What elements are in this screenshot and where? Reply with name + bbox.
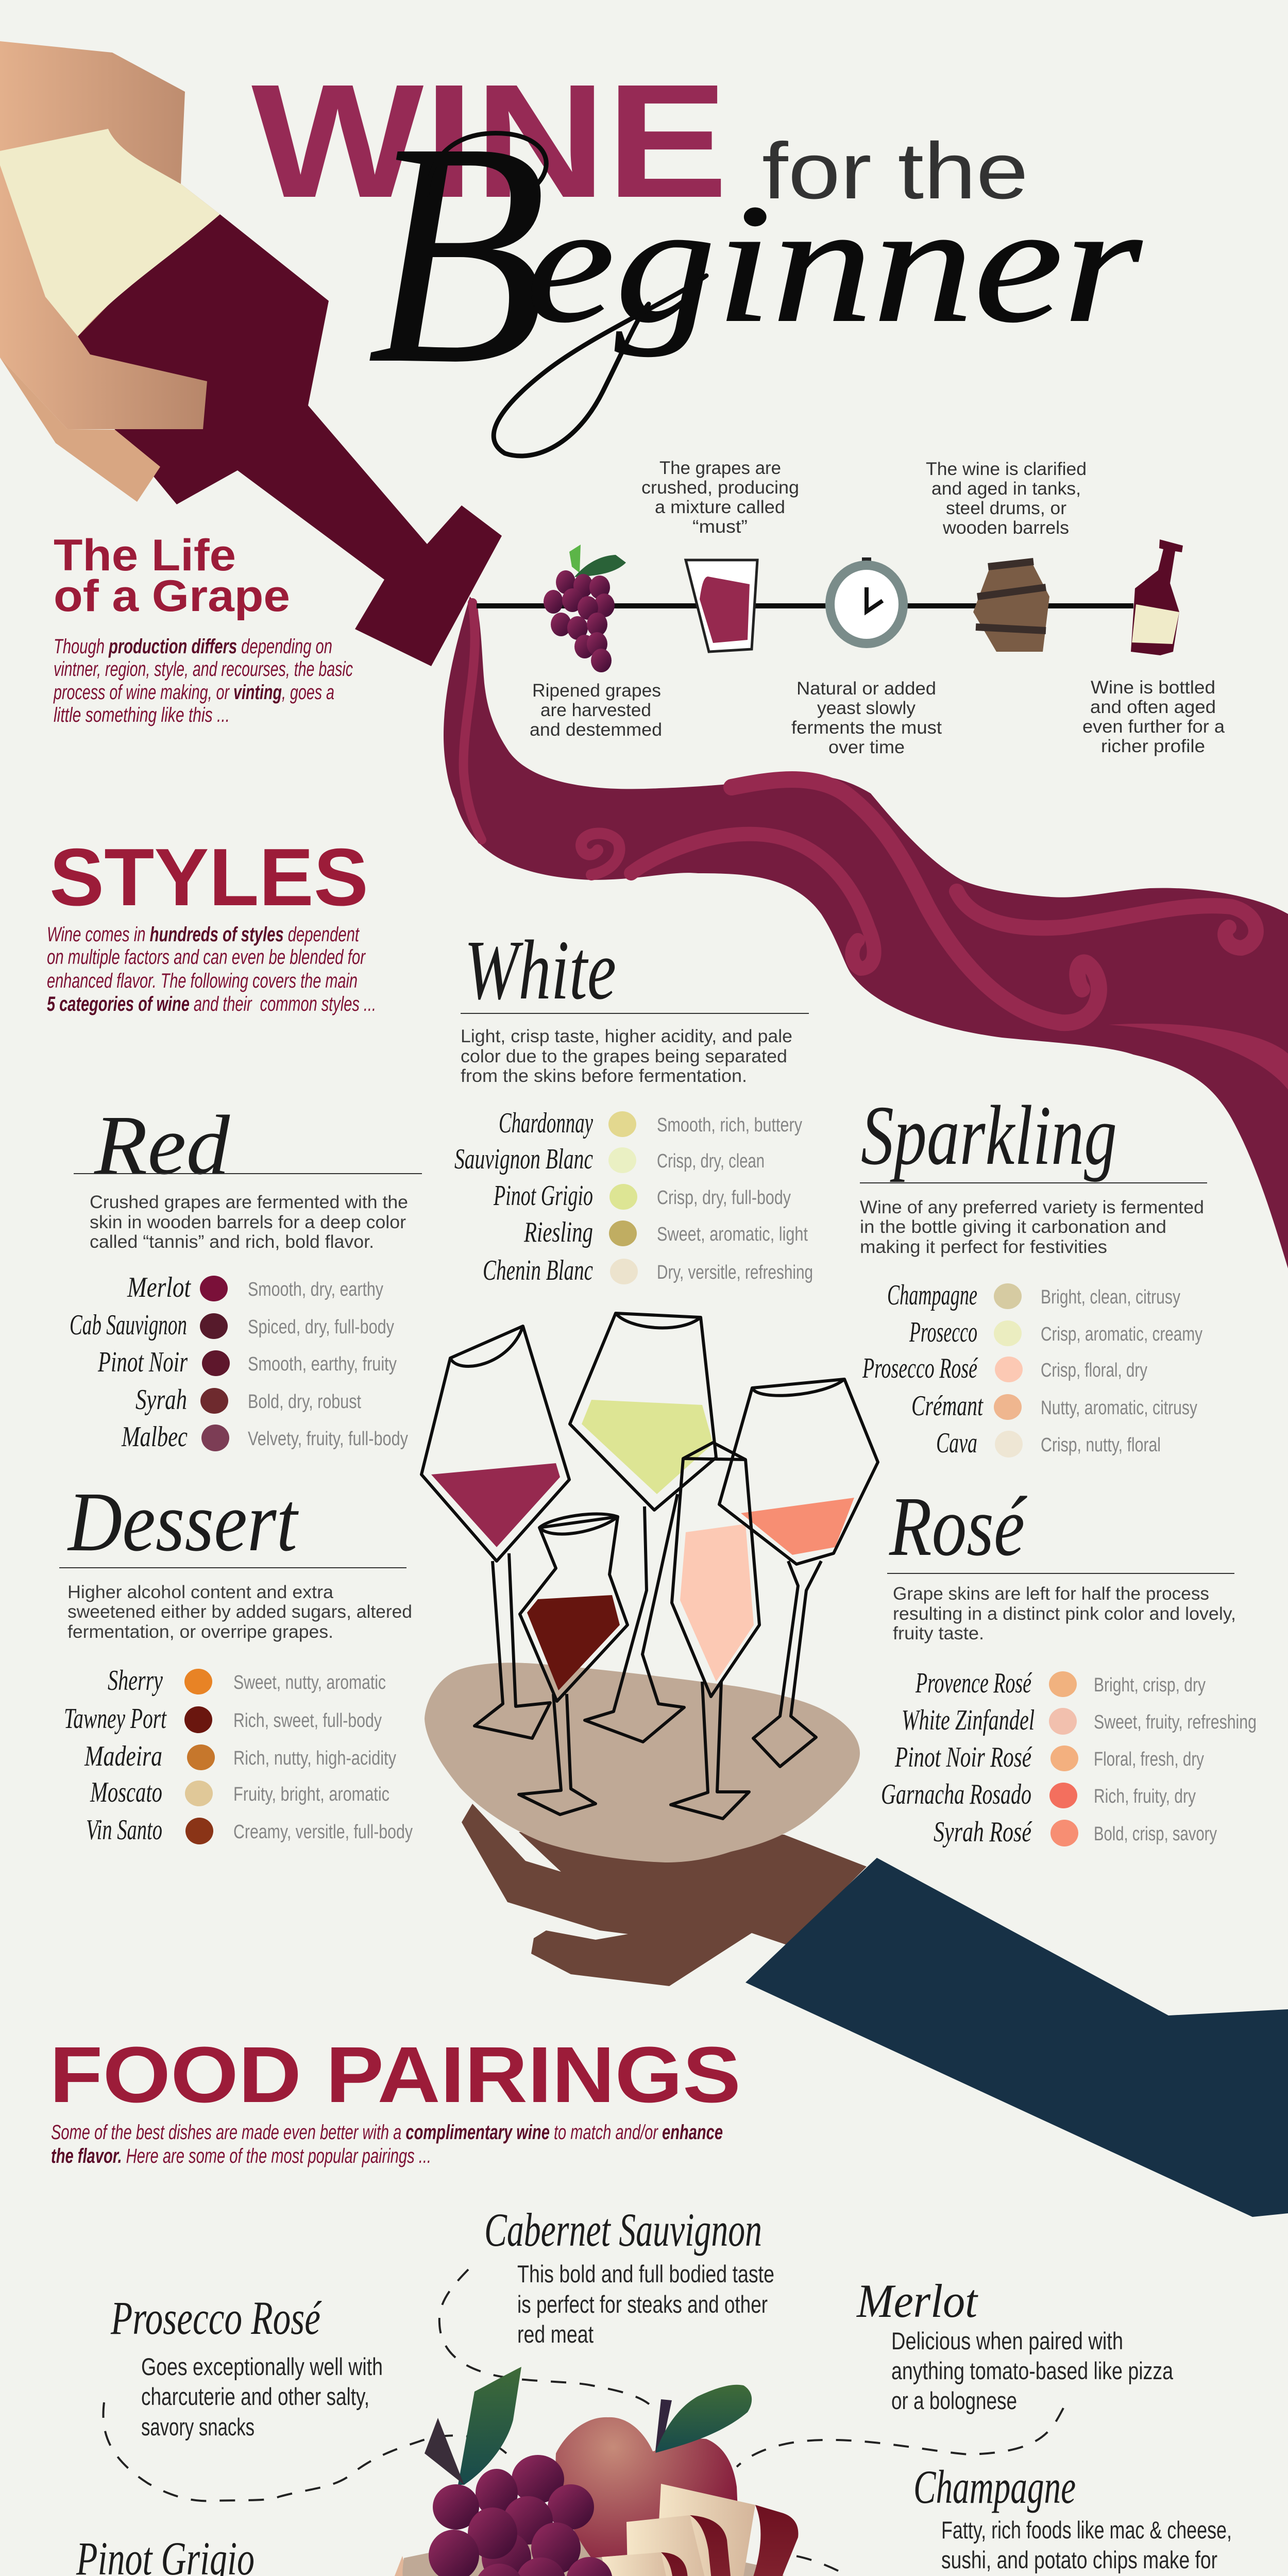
list: red varieties: Bold, dry, robust — [248, 1391, 361, 1413]
illustration: hand holding fruit plate — [374, 2367, 798, 2576]
plate — [402, 2524, 789, 2576]
description: red — [90, 1192, 408, 1252]
list: sparkling varieties: Prosecco Rosé — [862, 1352, 978, 1384]
title: WINE — [251, 50, 728, 231]
step text: the grapes are crushed: a mixture called — [655, 497, 785, 517]
tray — [425, 1663, 860, 1862]
text: champagne pairing — [913, 2461, 1232, 2576]
icon: crushed grapes glass — [686, 560, 757, 652]
step text: wine is clarified: and aged in tanks, — [931, 479, 1081, 499]
step text: ripened grapes: and destemmed — [530, 720, 662, 740]
intro text: styles — [47, 923, 376, 1015]
list: dessert varieties — [64, 1665, 413, 1846]
step text: wine is bottled — [1082, 677, 1225, 756]
description: white — [461, 1026, 792, 1086]
step text: wine is bottled: even further for a — [1082, 717, 1225, 737]
list: dessert varieties: Moscato — [90, 1776, 162, 1808]
list: red varieties — [70, 1272, 408, 1453]
intro text: food pairings: Some of the best dishes are made even better with a complimentary wine to match and/or enhance — [51, 2121, 723, 2144]
description: red: skin in wooden barrels for a deep color — [90, 1212, 406, 1232]
step text: wine is bottled: Wine is bottled — [1091, 677, 1215, 698]
grapes — [429, 2455, 634, 2576]
title: B — [367, 77, 547, 430]
list: dessert varieties: Fruity, bright, aromatic — [233, 1784, 389, 1805]
list: white varieties: Pinot Grigio — [493, 1180, 593, 1212]
text: merlot pairing: Merlot — [856, 2275, 978, 2327]
list: dessert varieties: Madeira — [84, 1740, 162, 1772]
description: white: Light, crisp taste, higher acidity, and pale — [461, 1026, 792, 1046]
wine fills — [431, 1400, 854, 1690]
text: merlot pairing: anything tomato-based like pizza — [891, 2357, 1174, 2384]
list: dessert varieties: Sherry — [108, 1665, 163, 1697]
description: dessert: sweetened either by added sugars, altered — [67, 1602, 412, 1622]
list: rosé varieties: Garnacha Rosado — [881, 1778, 1031, 1810]
intro text: life of a grape: process of wine making, or vinting, goes a — [53, 681, 334, 704]
wine stream pouring from bottle — [444, 597, 1288, 1268]
intro text: styles: Wine comes in hundreds of styles dependent — [47, 923, 360, 946]
list: rosé varieties: Provence Rosé — [915, 1667, 1032, 1699]
leaves — [425, 2367, 521, 2485]
list: rosé varieties: Pinot Noir Rosé — [894, 1741, 1032, 1773]
list: red varieties: Smooth, dry, earthy — [248, 1279, 383, 1300]
intro text: food pairings: the flavor. Here are some of the most popular pairings ... — [51, 2145, 431, 2167]
list: rosé varieties: White Zinfandel — [902, 1704, 1035, 1736]
step text: natural or added yeast: ferments the must — [791, 718, 942, 738]
list: sparkling varieties: Crisp, aromatic, creamy — [1041, 1324, 1202, 1345]
step text: the grapes are crushed — [641, 458, 799, 537]
heading: styles: STYLES — [49, 832, 368, 923]
step text: the grapes are crushed: crushed, producing — [641, 478, 799, 498]
illustration: five wine glasses — [421, 1313, 878, 1819]
step text: wine is bottled: richer profile — [1101, 736, 1205, 756]
step text: the grapes are crushed: “must” — [692, 517, 748, 537]
cheese wedges — [602, 2484, 798, 2576]
description: red: called “tannis” and rich, bold flavor. — [90, 1232, 374, 1252]
list: white varieties: Dry, versitle, refreshing — [657, 1262, 813, 1283]
heading: the life of a grape — [54, 531, 290, 621]
title: eginner — [526, 170, 1145, 358]
list: dessert varieties: Vin Santo — [86, 1814, 162, 1846]
description: rosé: fruity taste. — [893, 1623, 984, 1643]
list: rosé varieties: Bright, crisp, dry — [1094, 1674, 1206, 1696]
list: sparkling varieties — [862, 1279, 1202, 1459]
list: dessert varieties: Rich, sweet, full-body — [233, 1710, 382, 1732]
intro text: life of a grape: vintner, region, style, and recourses, the basic — [54, 658, 353, 681]
step text: the grapes are crushed: The grapes are — [659, 458, 781, 478]
list: white varieties: Smooth, rich, buttery — [657, 1114, 802, 1136]
list: dessert varieties: Sweet, nutty, aromatic — [233, 1672, 386, 1693]
intro text: life of a grape: Though production differs depending on — [54, 635, 332, 658]
panel: sparkling wines — [860, 1088, 1207, 1459]
list: red varieties: Pinot Noir — [97, 1346, 188, 1378]
text: cabernet sauvignon pairing: Cabernet Sauvignon — [484, 2204, 762, 2256]
list: white varieties: Chenin Blanc — [483, 1255, 593, 1286]
list: rosé varieties: Floral, fresh, dry — [1094, 1749, 1204, 1770]
step text: natural or added yeast: over time — [828, 737, 905, 757]
description: white: from the skins before fermentation. — [461, 1066, 747, 1086]
text: cabernet sauvignon pairing: red meat — [517, 2320, 594, 2348]
heading: red: Red — [94, 1098, 230, 1192]
description: rosé: Grape skins are left for half the process — [893, 1584, 1209, 1604]
panel: white wines — [454, 923, 813, 1286]
list: white varieties — [454, 1107, 813, 1286]
text: cabernet sauvignon pairing: is perfect for steaks and other — [517, 2291, 768, 2318]
description: red: Crushed grapes are fermented with the — [90, 1192, 408, 1212]
icon: grape bunch — [544, 545, 626, 672]
heading: white: White — [464, 923, 616, 1017]
heading: food pairings: FOOD PAIRINGS — [49, 2030, 741, 2119]
text: champagne pairing: Champagne — [913, 2461, 1076, 2513]
list: sparkling varieties: Champagne — [887, 1279, 977, 1311]
list: dessert varieties: Tawney Port — [64, 1703, 167, 1735]
list: sparkling varieties: Cava — [936, 1427, 977, 1459]
description: sparkling: making it perfect for festivities — [860, 1237, 1107, 1257]
description: rosé: resulting in a distinct pink color and lovely, — [893, 1604, 1236, 1624]
list: rosé varieties — [881, 1667, 1257, 1848]
list: rosé varieties: Rich, fruity, dry — [1094, 1786, 1196, 1807]
description: white: color due to the grapes being separated — [461, 1046, 787, 1066]
list: red varieties: Cab Sauvignon — [70, 1309, 187, 1341]
intro text: styles: 5 categories of wine and their common styles ... — [47, 993, 376, 1015]
list: red varieties: Spiced, dry, full-body — [248, 1316, 394, 1338]
hand — [462, 1804, 867, 1986]
illustration: hand pouring wine bottle — [0, 41, 502, 666]
text: prosecco rosé pairing: Prosecco Rosé — [110, 2292, 322, 2344]
text: merlot pairing: or a bolognese — [891, 2387, 1017, 2414]
intro text: life of a grape — [53, 635, 353, 726]
panel: dessert wines — [59, 1475, 413, 1846]
list: white varieties: Chardonnay — [499, 1107, 593, 1139]
list: sparkling varieties: Crisp, floral, dry — [1041, 1360, 1147, 1381]
step text: wine is clarified: wooden barrels — [942, 518, 1069, 538]
step text: ripened grapes: Ripened grapes — [532, 681, 661, 701]
step text: natural or added yeast: Natural or added — [796, 679, 936, 699]
text: champagne pairing: sushi, and potato chips make for — [941, 2546, 1217, 2573]
list: white varieties: Riesling — [523, 1216, 593, 1248]
title — [251, 50, 1145, 456]
panel: rosé wines — [881, 1479, 1257, 1848]
sleeve — [745, 1858, 1288, 2217]
intro text: food pairings — [51, 2121, 723, 2167]
text: prosecco rosé pairing: Goes exceptionally well with — [141, 2353, 383, 2380]
intro text: life of a grape: little something like this ... — [54, 704, 230, 726]
list: sparkling varieties: Nutty, aromatic, citrusy — [1041, 1397, 1197, 1419]
step text: wine is clarified: steel drums, or — [946, 498, 1066, 518]
step text: ripened grapes — [530, 681, 662, 740]
apple — [556, 2385, 752, 2558]
list: white varieties: Sauvignon Blanc — [454, 1143, 593, 1175]
list: dessert varieties: Rich, nutty, high-acidity — [233, 1748, 396, 1769]
list: red varieties: Velvety, fruity, full-body — [248, 1428, 408, 1450]
description: dessert: Higher alcohol content and extra — [67, 1582, 334, 1602]
list: red varieties: Malbec — [121, 1421, 188, 1453]
list: sparkling varieties: Bright, clean, citrusy — [1041, 1286, 1180, 1308]
list: sparkling varieties: Crémant — [911, 1390, 984, 1422]
list: dessert varieties: Creamy, versitle, full-body — [233, 1821, 413, 1843]
title: for the — [762, 126, 1028, 215]
list: red varieties: Merlot — [127, 1272, 191, 1303]
text: prosecco rosé pairing: savory snacks — [141, 2413, 255, 2441]
list: rosé varieties: Bold, crisp, savory — [1094, 1823, 1217, 1845]
list: white varieties: Crisp, dry, clean — [657, 1150, 765, 1172]
illustration: hand holding tray — [425, 1663, 1288, 2217]
panel: red wines — [70, 1098, 422, 1453]
description: sparkling: Wine of any preferred variety is fermented — [860, 1197, 1204, 1217]
list: red varieties: Smooth, earthy, fruity — [248, 1353, 397, 1375]
step text: wine is clarified: The wine is clarified — [926, 459, 1087, 479]
description: dessert: fermentation, or overripe grapes. — [67, 1622, 333, 1642]
intro text: styles: enhanced flavor. The following covers the main — [47, 970, 358, 992]
text: cabernet sauvignon pairing: This bold and full bodied taste — [517, 2260, 774, 2287]
heading: the life of a grape: of a Grape — [54, 571, 290, 621]
list: white varieties: Sweet, aromatic, light — [657, 1224, 808, 1245]
step text: natural or added yeast: yeast slowly — [817, 698, 916, 718]
list: red varieties: Syrah — [135, 1384, 187, 1416]
glass outlines — [421, 1313, 878, 1819]
step text: ripened grapes: are harvested — [540, 700, 651, 720]
heading: rosé: Rosé — [889, 1479, 1028, 1573]
list: white varieties: Crisp, dry, full-body — [657, 1187, 791, 1209]
intro text: styles: on multiple factors and can even be blended for — [47, 946, 366, 969]
list: sparkling varieties: Prosecco — [909, 1316, 977, 1348]
dashed connectors — [86, 2269, 1099, 2576]
heading: sparkling: Sparkling — [861, 1088, 1117, 1182]
timeline line — [477, 603, 1133, 608]
text: merlot pairing — [856, 2275, 1174, 2414]
step text: wine is bottled: and often aged — [1090, 697, 1216, 717]
heading: the life of a grape: The Life — [54, 531, 236, 580]
description: sparkling — [860, 1197, 1204, 1257]
text: prosecco rosé pairing: charcuterie and other salty, — [141, 2383, 369, 2410]
list: sparkling varieties: Crisp, nutty, floral — [1041, 1434, 1161, 1456]
icon: stopwatch — [830, 557, 903, 643]
icon: wine bottle — [1131, 539, 1183, 655]
text: merlot pairing: Delicious when paired with — [891, 2327, 1123, 2354]
list: rosé varieties: Syrah Rosé — [934, 1816, 1032, 1848]
description: rosé — [893, 1584, 1236, 1643]
text: prosecco rosé pairing — [110, 2292, 383, 2441]
step text: natural or added yeast — [791, 679, 942, 757]
step text: wine is clarified — [926, 459, 1087, 538]
description: dessert — [67, 1582, 412, 1642]
hand — [374, 2556, 759, 2576]
description: sparkling: in the bottle giving it carbonation and — [860, 1217, 1166, 1237]
icon: wooden barrel — [973, 562, 1049, 652]
text: cabernet sauvignon pairing — [484, 2204, 774, 2348]
heading: dessert: Dessert — [67, 1475, 299, 1569]
